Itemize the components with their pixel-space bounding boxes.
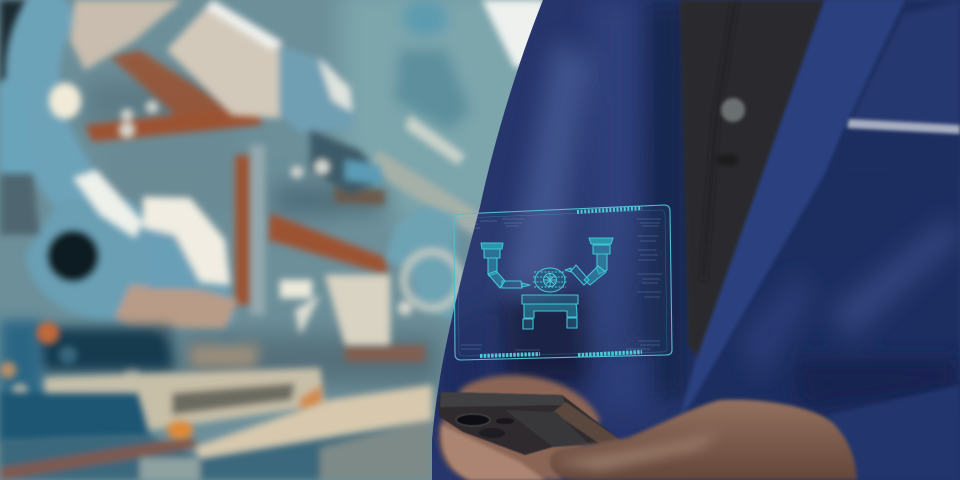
bokeh spots [119,101,412,380]
smartphone [438,392,623,455]
orange clamp [167,421,193,439]
hologram panel [454,205,672,360]
hazard stripes [480,208,642,356]
bright window top right [482,0,545,68]
white blurred machinery [280,275,390,345]
diagonal beam [370,150,500,245]
hologram frame [454,205,672,360]
chest pocket [828,130,960,176]
machine platform [0,392,150,442]
person: jacket and shirt [425,0,960,480]
hologram inner frame [458,210,667,356]
jacket right body [682,0,960,480]
left robot arm icon [481,243,530,288]
left hand [439,375,600,480]
blue arm right side [385,205,460,320]
blue robot arm [0,0,238,328]
torso folds [740,215,960,410]
right hand [550,400,857,480]
grey vertical pole [250,145,265,315]
thumb highlight [552,432,720,470]
rust orange girders [85,50,425,362]
jacket base with folds [425,0,960,480]
table surface [195,385,432,458]
dark top left corner [0,0,26,85]
left lower machinery [0,320,45,440]
lapel [680,0,905,415]
lower floor and equipment [0,418,432,480]
pocket square [847,119,960,134]
second shirt button [716,154,738,166]
palm under phone [442,425,545,480]
shirt [680,0,825,360]
shirt placket [703,0,735,280]
blurred factory background [0,0,550,480]
right sleeve [828,385,960,480]
dark machine base [35,327,175,372]
turbine part icon [533,268,567,292]
cream upper arm [70,0,355,132]
workbench icon [522,295,578,329]
robot arm joint [48,231,98,281]
distant arm top right [395,0,470,130]
shirt button [721,98,745,122]
hologram micro readouts [461,219,662,350]
arm highlights [49,83,230,288]
hands and phone [438,375,857,480]
right robot arm icon [565,238,613,285]
right chest [850,0,960,130]
gripper centre [310,130,385,195]
